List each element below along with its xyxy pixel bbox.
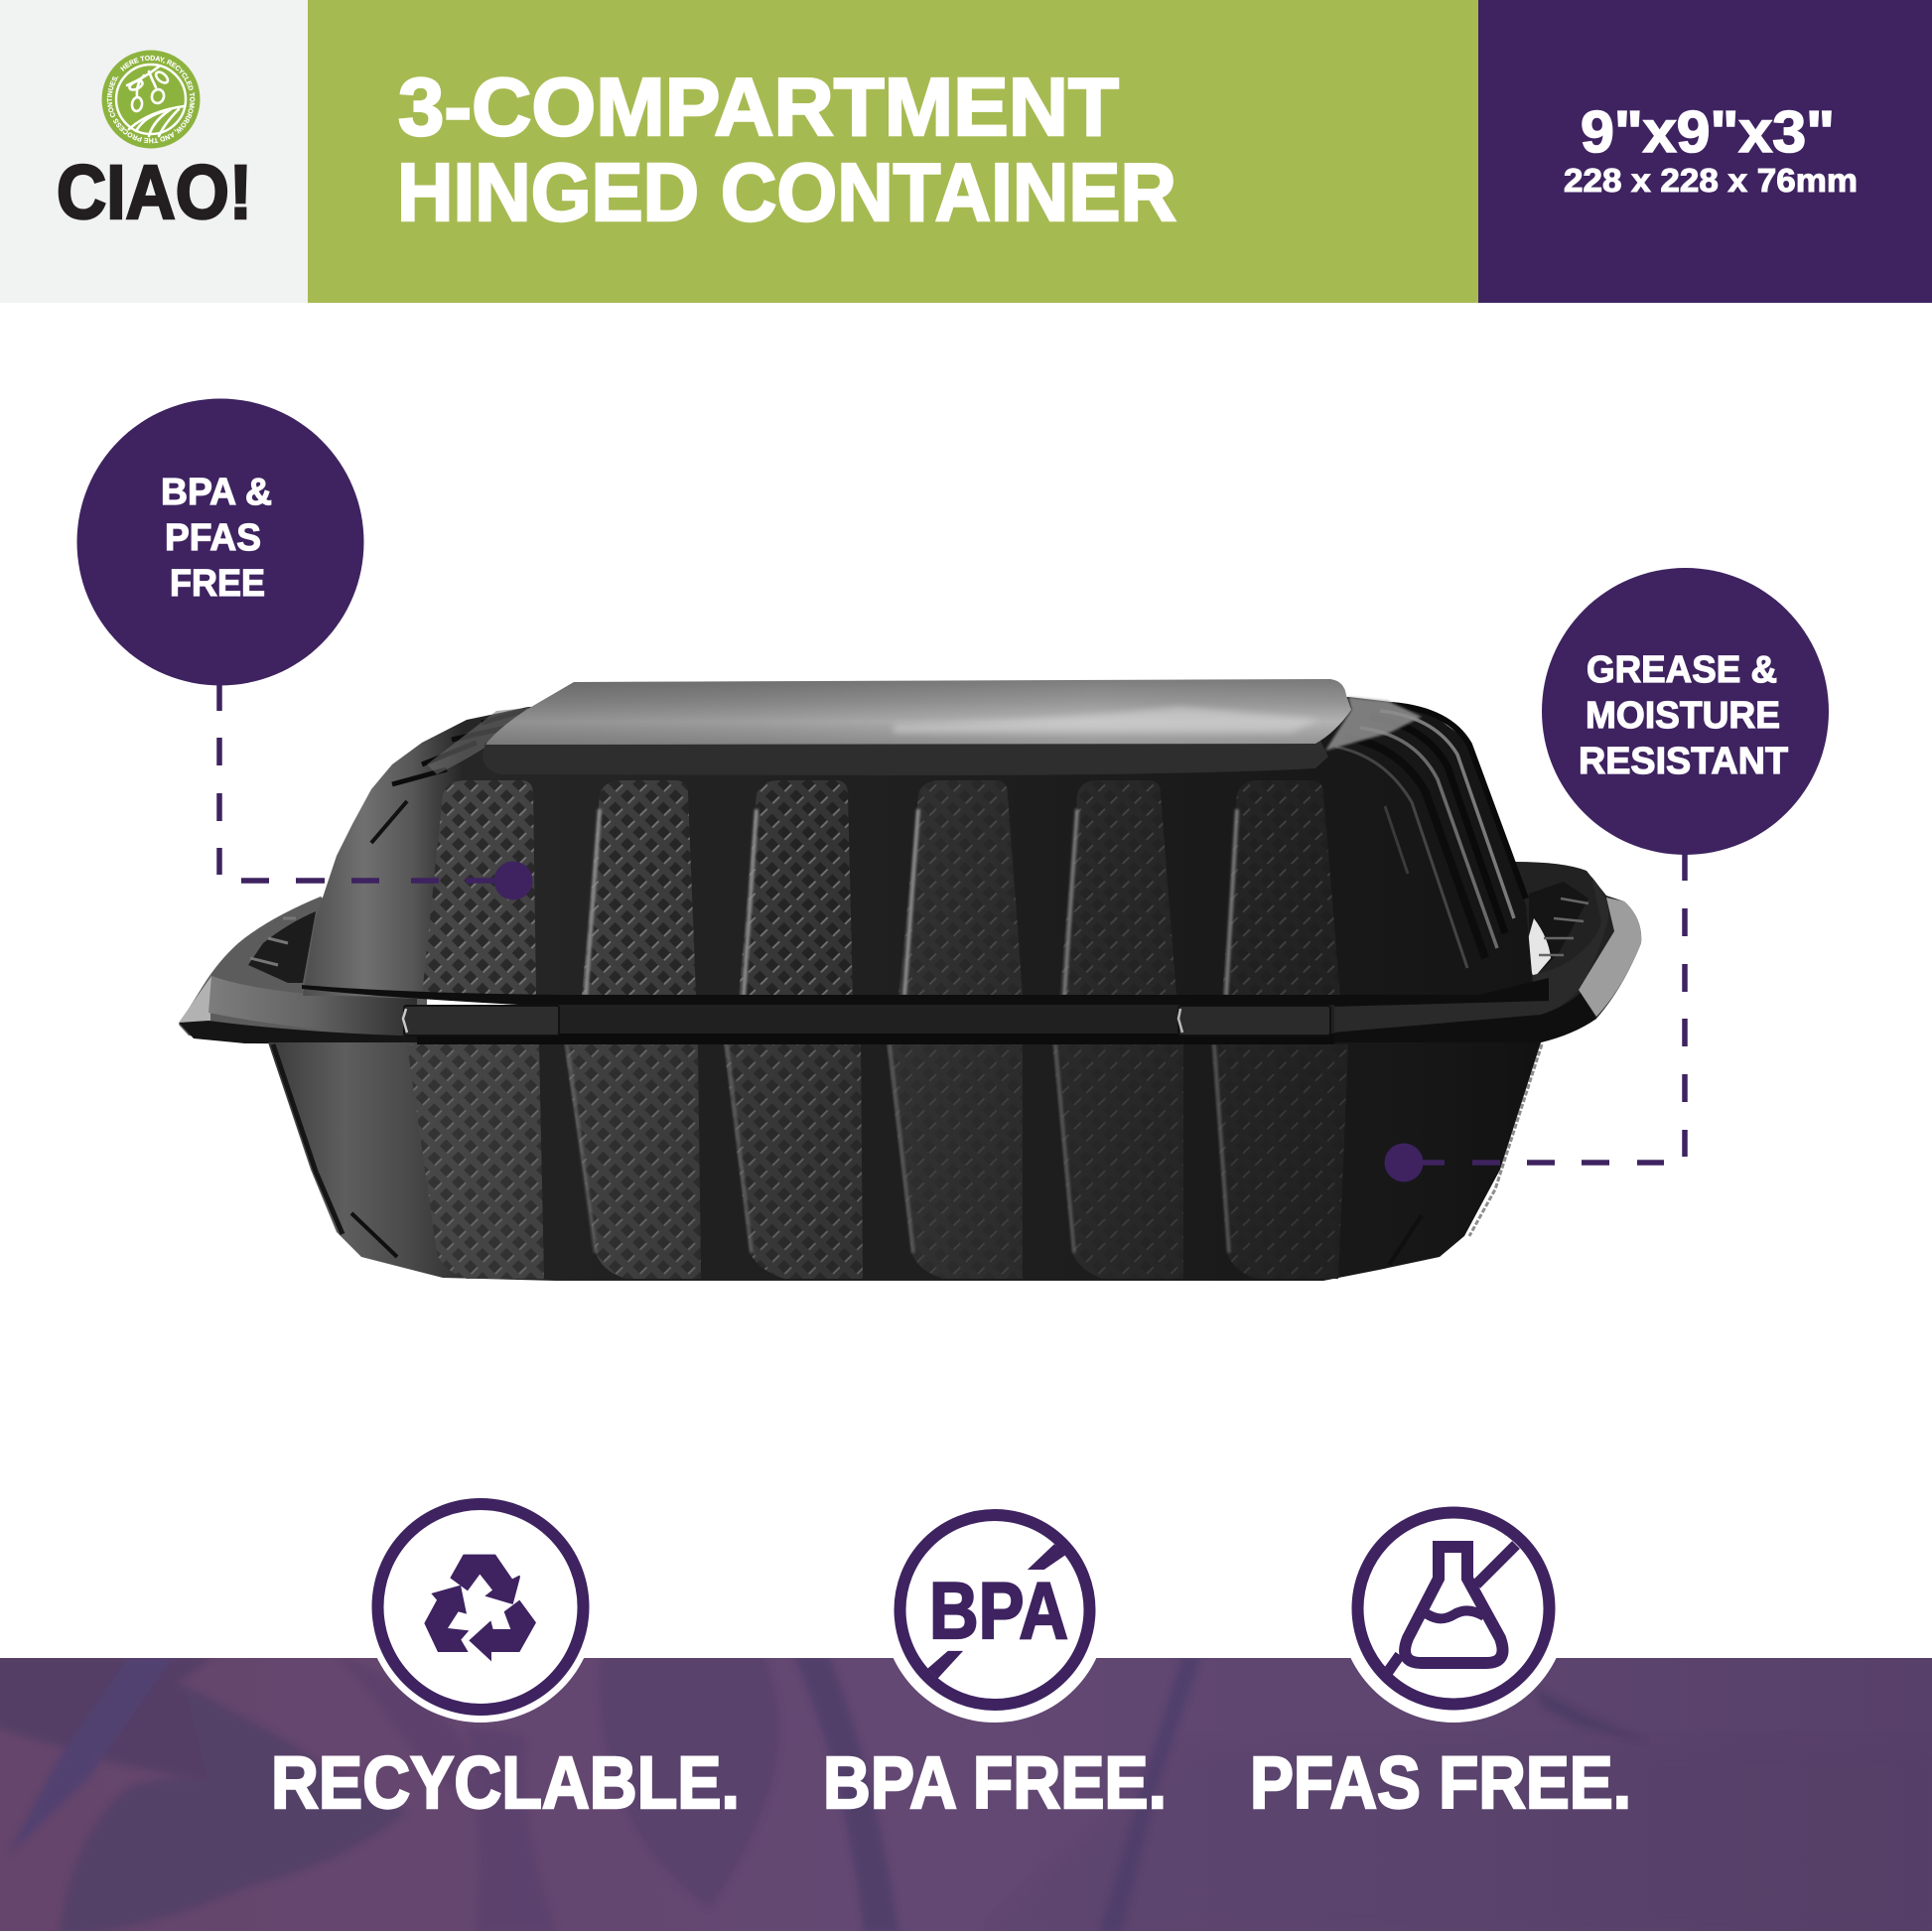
- callout text line 1: BPA &: [161, 472, 272, 513]
- callout text line 2: MOISTURE: [1586, 695, 1780, 737]
- strike bars: [927, 1544, 1067, 1679]
- callout dot: [494, 862, 532, 899]
- lower tray body: [268, 1042, 1542, 1281]
- flask: [1386, 1545, 1516, 1675]
- icon: recyclable: [365, 1492, 596, 1723]
- dimensions millimetres: 228 x 228 x 76mm: [1564, 163, 1858, 200]
- callout text line 3: RESISTANT: [1579, 741, 1788, 782]
- BPA lettering: BPA: [929, 1567, 1068, 1656]
- lower textured panels: [407, 1044, 1348, 1279]
- right clasp: [1178, 1006, 1330, 1035]
- header logo panel: [0, 0, 308, 303]
- icon: BPA free: [883, 1498, 1107, 1723]
- left flange: [179, 897, 427, 1044]
- title line 1: 3-COMPARTMENT: [398, 61, 1119, 153]
- callout text line 3: FREE: [170, 563, 265, 605]
- callout: BPA and PFAS free: [77, 399, 363, 685]
- product photo: black hinged container: [179, 679, 1641, 1281]
- right shoulder ribs: [1335, 705, 1526, 968]
- raised lid panel: [483, 679, 1351, 775]
- upper textured panels: [422, 780, 1340, 996]
- label: PFAS free: PFAS FREE.: [1250, 1741, 1631, 1824]
- logo badge: HERE TODAY, RECYCLED TOMORROW, AND THE PROCESS CONTINUES.: [107, 56, 195, 143]
- closure rim with clasps: [302, 978, 1549, 1044]
- dimensions inches: 9"x9"x3": [1581, 99, 1835, 165]
- recycling arrows: [424, 1555, 536, 1661]
- strike bars: [1386, 1545, 1516, 1675]
- header title panel: [308, 0, 1478, 303]
- callout line: grease and moisture resistant: [1384, 854, 1685, 1181]
- label: BPA free: BPA FREE.: [823, 1741, 1167, 1824]
- left clasp: [403, 1006, 559, 1035]
- left shoulder ribs: [392, 710, 526, 784]
- label: recyclable: RECYCLABLE.: [271, 1741, 740, 1824]
- upper lid body: [303, 697, 1534, 996]
- icon: PFAS free: [1339, 1494, 1568, 1723]
- callout line: BPA and PFAS free: [219, 684, 532, 899]
- callout text line 2: PFAS: [165, 517, 261, 559]
- header size panel: [1478, 0, 1932, 303]
- callout: grease and moisture resistant: [1542, 568, 1829, 855]
- bottom band with leaf background: [0, 1656, 1932, 1932]
- logo wordmark: CIAO!: [57, 150, 252, 235]
- title line 2: HINGED CONTAINER: [397, 146, 1176, 238]
- callout text line 1: GREASE &: [1587, 649, 1777, 691]
- right flange: [1330, 862, 1641, 1044]
- callout dot: [1384, 1144, 1424, 1181]
